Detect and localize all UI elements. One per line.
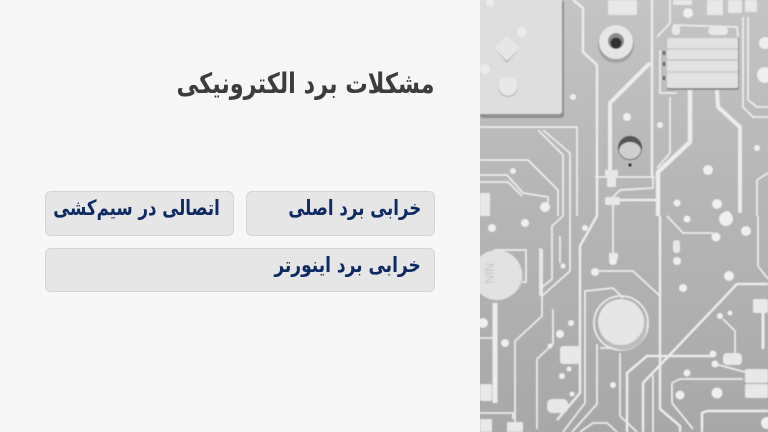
card: main board failure: خرابی برد اصلی <box>288 196 421 220</box>
circuit traces <box>480 0 768 432</box>
board hole <box>618 136 642 166</box>
top components <box>480 0 757 216</box>
card: main board failure <box>246 191 435 236</box>
card: wiring short <box>45 191 234 236</box>
circuit board image panel <box>480 0 768 432</box>
capacitor: NIN cylinder <box>472 250 526 300</box>
component: ring connector <box>598 25 634 63</box>
component: finned heat sink <box>664 38 739 90</box>
solder pads <box>478 8 768 429</box>
capacitor: round cylinder <box>594 296 648 350</box>
card: inverter board failure <box>45 248 435 292</box>
card: wiring short: اتصالی در سیم‌کشی <box>53 196 220 220</box>
component: large square chip <box>477 0 564 118</box>
small components lower <box>480 240 768 432</box>
card: inverter board failure: خرابی برد اینورتر <box>275 253 421 277</box>
capacitor: NIN cylinder: NIN <box>482 263 496 284</box>
title: مشکلات برد الکترونیکی <box>177 67 435 100</box>
